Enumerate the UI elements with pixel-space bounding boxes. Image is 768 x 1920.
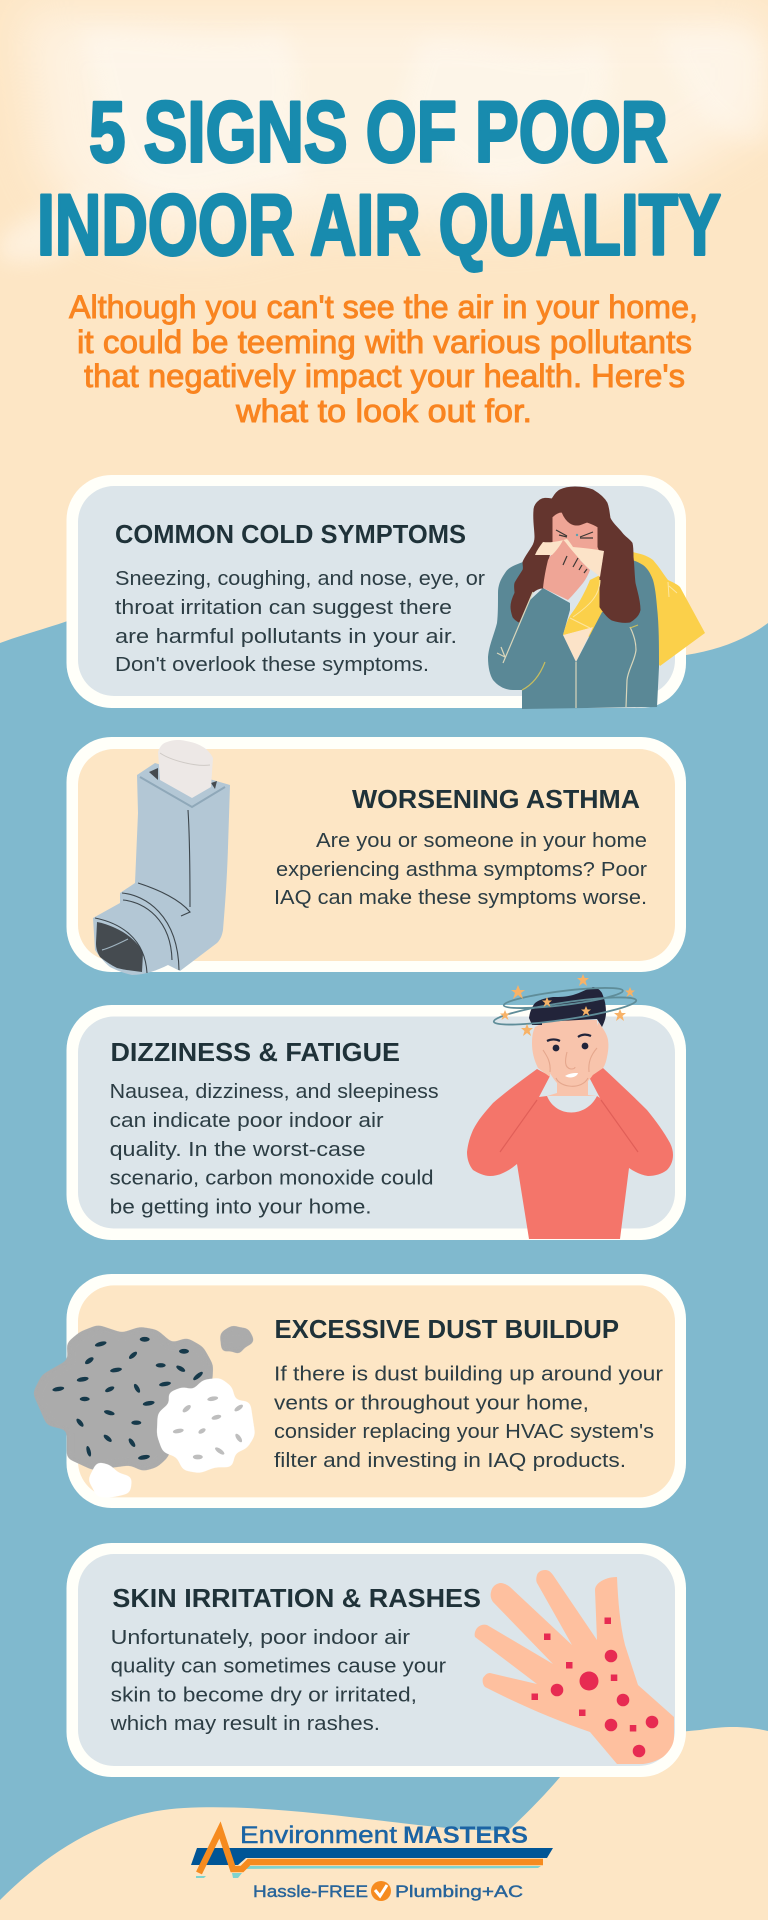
body text: Sneezing, coughing, and nose, eye, or [115,568,485,590]
panel: excessive dust buildup [33,1274,686,1508]
body text: throat irritation can suggest there [115,597,452,619]
body text: Are you or someone in your home [316,830,647,852]
background: smoke texture [0,10,768,262]
heading: COMMON COLD SYMPTOMS [115,519,466,549]
intro paragraph: that negatively impact your health. Here's [84,358,685,394]
panel: common cold symptoms [66,475,705,709]
icon: dizzy man [467,974,673,1239]
logo: Environment Masters [191,1822,553,1901]
body text [109,1627,446,1735]
body text [274,1364,663,1472]
heading: WORSENING ASTHMA [352,784,640,814]
intro paragraph [69,289,698,429]
background: blue wave panel [0,589,768,1900]
body text: experiencing asthma symptoms? Poor [276,859,647,881]
logo blue band [191,1848,553,1865]
intro paragraph: Although you can't see the air in your home, [69,289,698,325]
icon: sneezing woman [488,487,705,709]
body text: Nausea, dizziness, and sleepiness [110,1081,439,1103]
logo name: Environment [240,1822,397,1849]
body text: vents or throughout your home, [274,1392,589,1414]
icon: inhaler [93,740,230,975]
body text: are harmful pollutants in your air. [115,626,457,648]
card background [66,1543,686,1777]
body text: Don't overlook these symptoms. [115,654,429,676]
title [37,84,721,274]
card background [66,1005,686,1240]
body text: be getting into your home. [110,1196,372,1218]
card background [66,1274,686,1508]
panel: skin irritation and rashes [66,1543,686,1777]
logo name: MASTERS [403,1822,528,1849]
body text: quality can sometimes cause your [111,1656,446,1678]
logo orange peak [199,1830,543,1873]
body text: consider replacing your HVAC system's [274,1421,654,1443]
logo name [240,1822,528,1849]
tagline: Hassle-FREE [253,1882,368,1901]
tagline [253,1881,523,1901]
body text: can indicate poor indoor air [110,1110,384,1132]
body text: If there is dust building up around your [274,1364,663,1386]
heading: SKIN IRRITATION & RASHES [112,1583,481,1613]
body text: filter and investing in IAQ products. [274,1450,626,1472]
card background [66,475,686,708]
heading: EXCESSIVE DUST BUILDUP [274,1314,619,1344]
panel: worsening asthma [66,737,686,975]
tagline: Plumbing+AC [395,1882,523,1901]
body text: quality. In the worst-case [110,1139,366,1161]
intro paragraph: it could be teeming with various pollutants [77,324,692,360]
icon: hand with rash [475,1570,674,1764]
body text [110,1081,439,1218]
body text: Unfortunately, poor indoor air [111,1627,410,1649]
panel: dizziness and fatigue [66,974,686,1240]
card background [66,737,686,972]
logo shadow stripe [196,1866,541,1878]
body text: skin to become dry or irritated, [111,1685,417,1707]
body text [274,830,647,909]
body text: IAQ can make these symptoms worse. [274,887,647,909]
body text: scenario, carbon monoxide could [110,1168,434,1190]
icon: dust clouds [33,1325,255,1497]
heading: DIZZINESS & FATIGUE [110,1037,400,1067]
intro paragraph: what to look out for. [235,393,532,429]
body text [115,568,485,676]
body text: which may result in rashes. [109,1713,380,1735]
